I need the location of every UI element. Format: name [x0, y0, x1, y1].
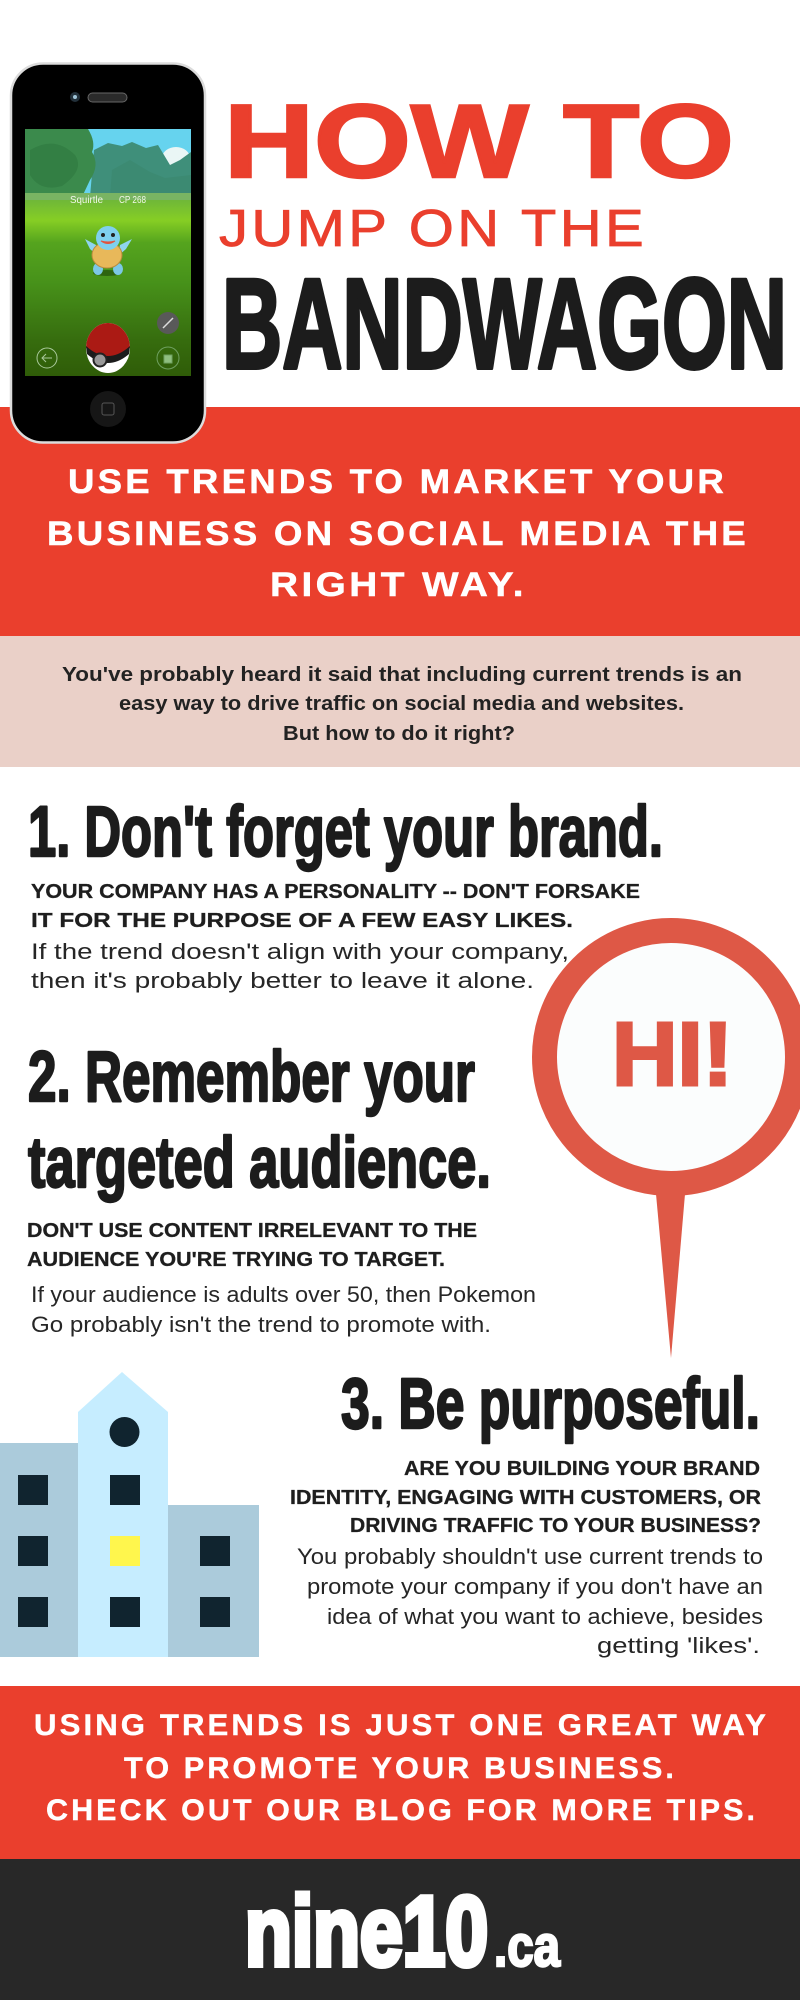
heading: tip 2: [28, 1038, 491, 1203]
intro text: easy way to drive traffic on social media and websites.: [119, 692, 684, 715]
subheading: tip 1: YOUR COMPANY HAS A PERSONALITY -- DON'T FORSAKE: [31, 880, 640, 903]
body: tip 3: getting 'likes'.: [597, 1633, 760, 1658]
panel: tip 3: [290, 1365, 763, 1658]
subtitle text: [47, 463, 749, 604]
call to action text: [34, 1709, 769, 1827]
label: Squirtle CP 268: CP 268: [119, 195, 146, 206]
panel: tip 1: [28, 793, 663, 993]
call to action text: USING TRENDS IS JUST ONE GREAT WAY: [34, 1709, 769, 1742]
panel: pink intro band: [0, 636, 800, 767]
body: tip 1: then it's probably better to leave it alone.: [31, 968, 534, 993]
Squirtle character: [85, 226, 132, 276]
panel: red call to action: [0, 1686, 800, 1859]
heading: tip 2: targeted audience.: [28, 1124, 491, 1203]
subheading: tip 1: [31, 880, 640, 932]
button: back arrow: [37, 348, 57, 368]
call to action text: TO PROMOTE YOUR BUSINESS.: [124, 1752, 677, 1785]
game screen: [25, 129, 191, 376]
title: HOW TO: HOW TO: [224, 84, 734, 200]
heading: tip 2: 2. Remember your: [28, 1038, 475, 1117]
subheading: tip 3: DRIVING TRAFFIC TO YOUR BUSINESS?: [350, 1514, 761, 1537]
label: Squirtle CP 268: Squirtle: [70, 195, 103, 206]
title: JUMP ON THE: JUMP ON THE: [219, 200, 647, 258]
button: effects: [157, 312, 179, 334]
intro text: But how to do it right?: [283, 722, 515, 745]
title: [219, 84, 787, 396]
panel: red subtitle band: [0, 407, 800, 636]
logo: nine10.ca: nine10: [245, 1876, 488, 1986]
pokeball: [86, 323, 130, 373]
icon: HI! speech balloon: [544, 930, 798, 1358]
subheading: tip 3: [290, 1457, 761, 1537]
call to action text: CHECK OUT OUR BLOG FOR MORE TIPS.: [46, 1794, 758, 1827]
button: bag: [157, 347, 179, 369]
body: tip 2: [31, 1282, 536, 1337]
subheading: tip 3: ARE YOU BUILDING YOUR BRAND: [404, 1457, 760, 1480]
body: tip 3: idea of what you want to achieve, besides: [327, 1604, 763, 1629]
body: tip 3: [297, 1544, 763, 1658]
subtitle text: USE TRENDS TO MARKET YOUR: [68, 463, 727, 501]
subheading: tip 2: [27, 1219, 477, 1271]
panel: dark footer: [0, 1859, 800, 2000]
body: tip 1: If the trend doesn't align with your company,: [31, 939, 569, 964]
intro text: You've probably heard it said that including current trends is an: [62, 663, 742, 686]
icon: phone showing Pokemon Go: [11, 64, 205, 442]
body: tip 3: You probably shouldn't use current trends to: [297, 1544, 763, 1569]
body: tip 1: [31, 939, 569, 993]
logo: nine10.ca: .ca: [494, 1914, 561, 1979]
body: tip 2: If your audience is adults over 50, then Pokemon: [31, 1282, 536, 1307]
subheading: tip 2: AUDIENCE YOU'RE TRYING TO TARGET.: [27, 1248, 445, 1271]
phone camera and speaker: [70, 92, 127, 102]
icon: HI! speech balloon: HI!: [612, 1005, 733, 1105]
icon: buildings: [0, 1372, 259, 1657]
body: tip 3: promote your company if you don't have an: [307, 1574, 763, 1599]
intro text: [62, 663, 742, 745]
subheading: tip 1: IT FOR THE PURPOSE OF A FEW EASY LIKES.: [31, 909, 573, 932]
subtitle text: BUSINESS ON SOCIAL MEDIA THE: [47, 515, 749, 553]
subheading: tip 3: IDENTITY, ENGAGING WITH CUSTOMERS, OR: [290, 1486, 761, 1509]
label: Squirtle CP 268: [70, 195, 146, 206]
home button: [90, 391, 126, 427]
subheading: tip 2: DON'T USE CONTENT IRRELEVANT TO THE: [27, 1219, 477, 1242]
panel: tip 2: [27, 1038, 536, 1337]
body: tip 2: Go probably isn't the trend to promote with.: [31, 1312, 491, 1337]
subtitle text: RIGHT WAY.: [270, 566, 527, 604]
